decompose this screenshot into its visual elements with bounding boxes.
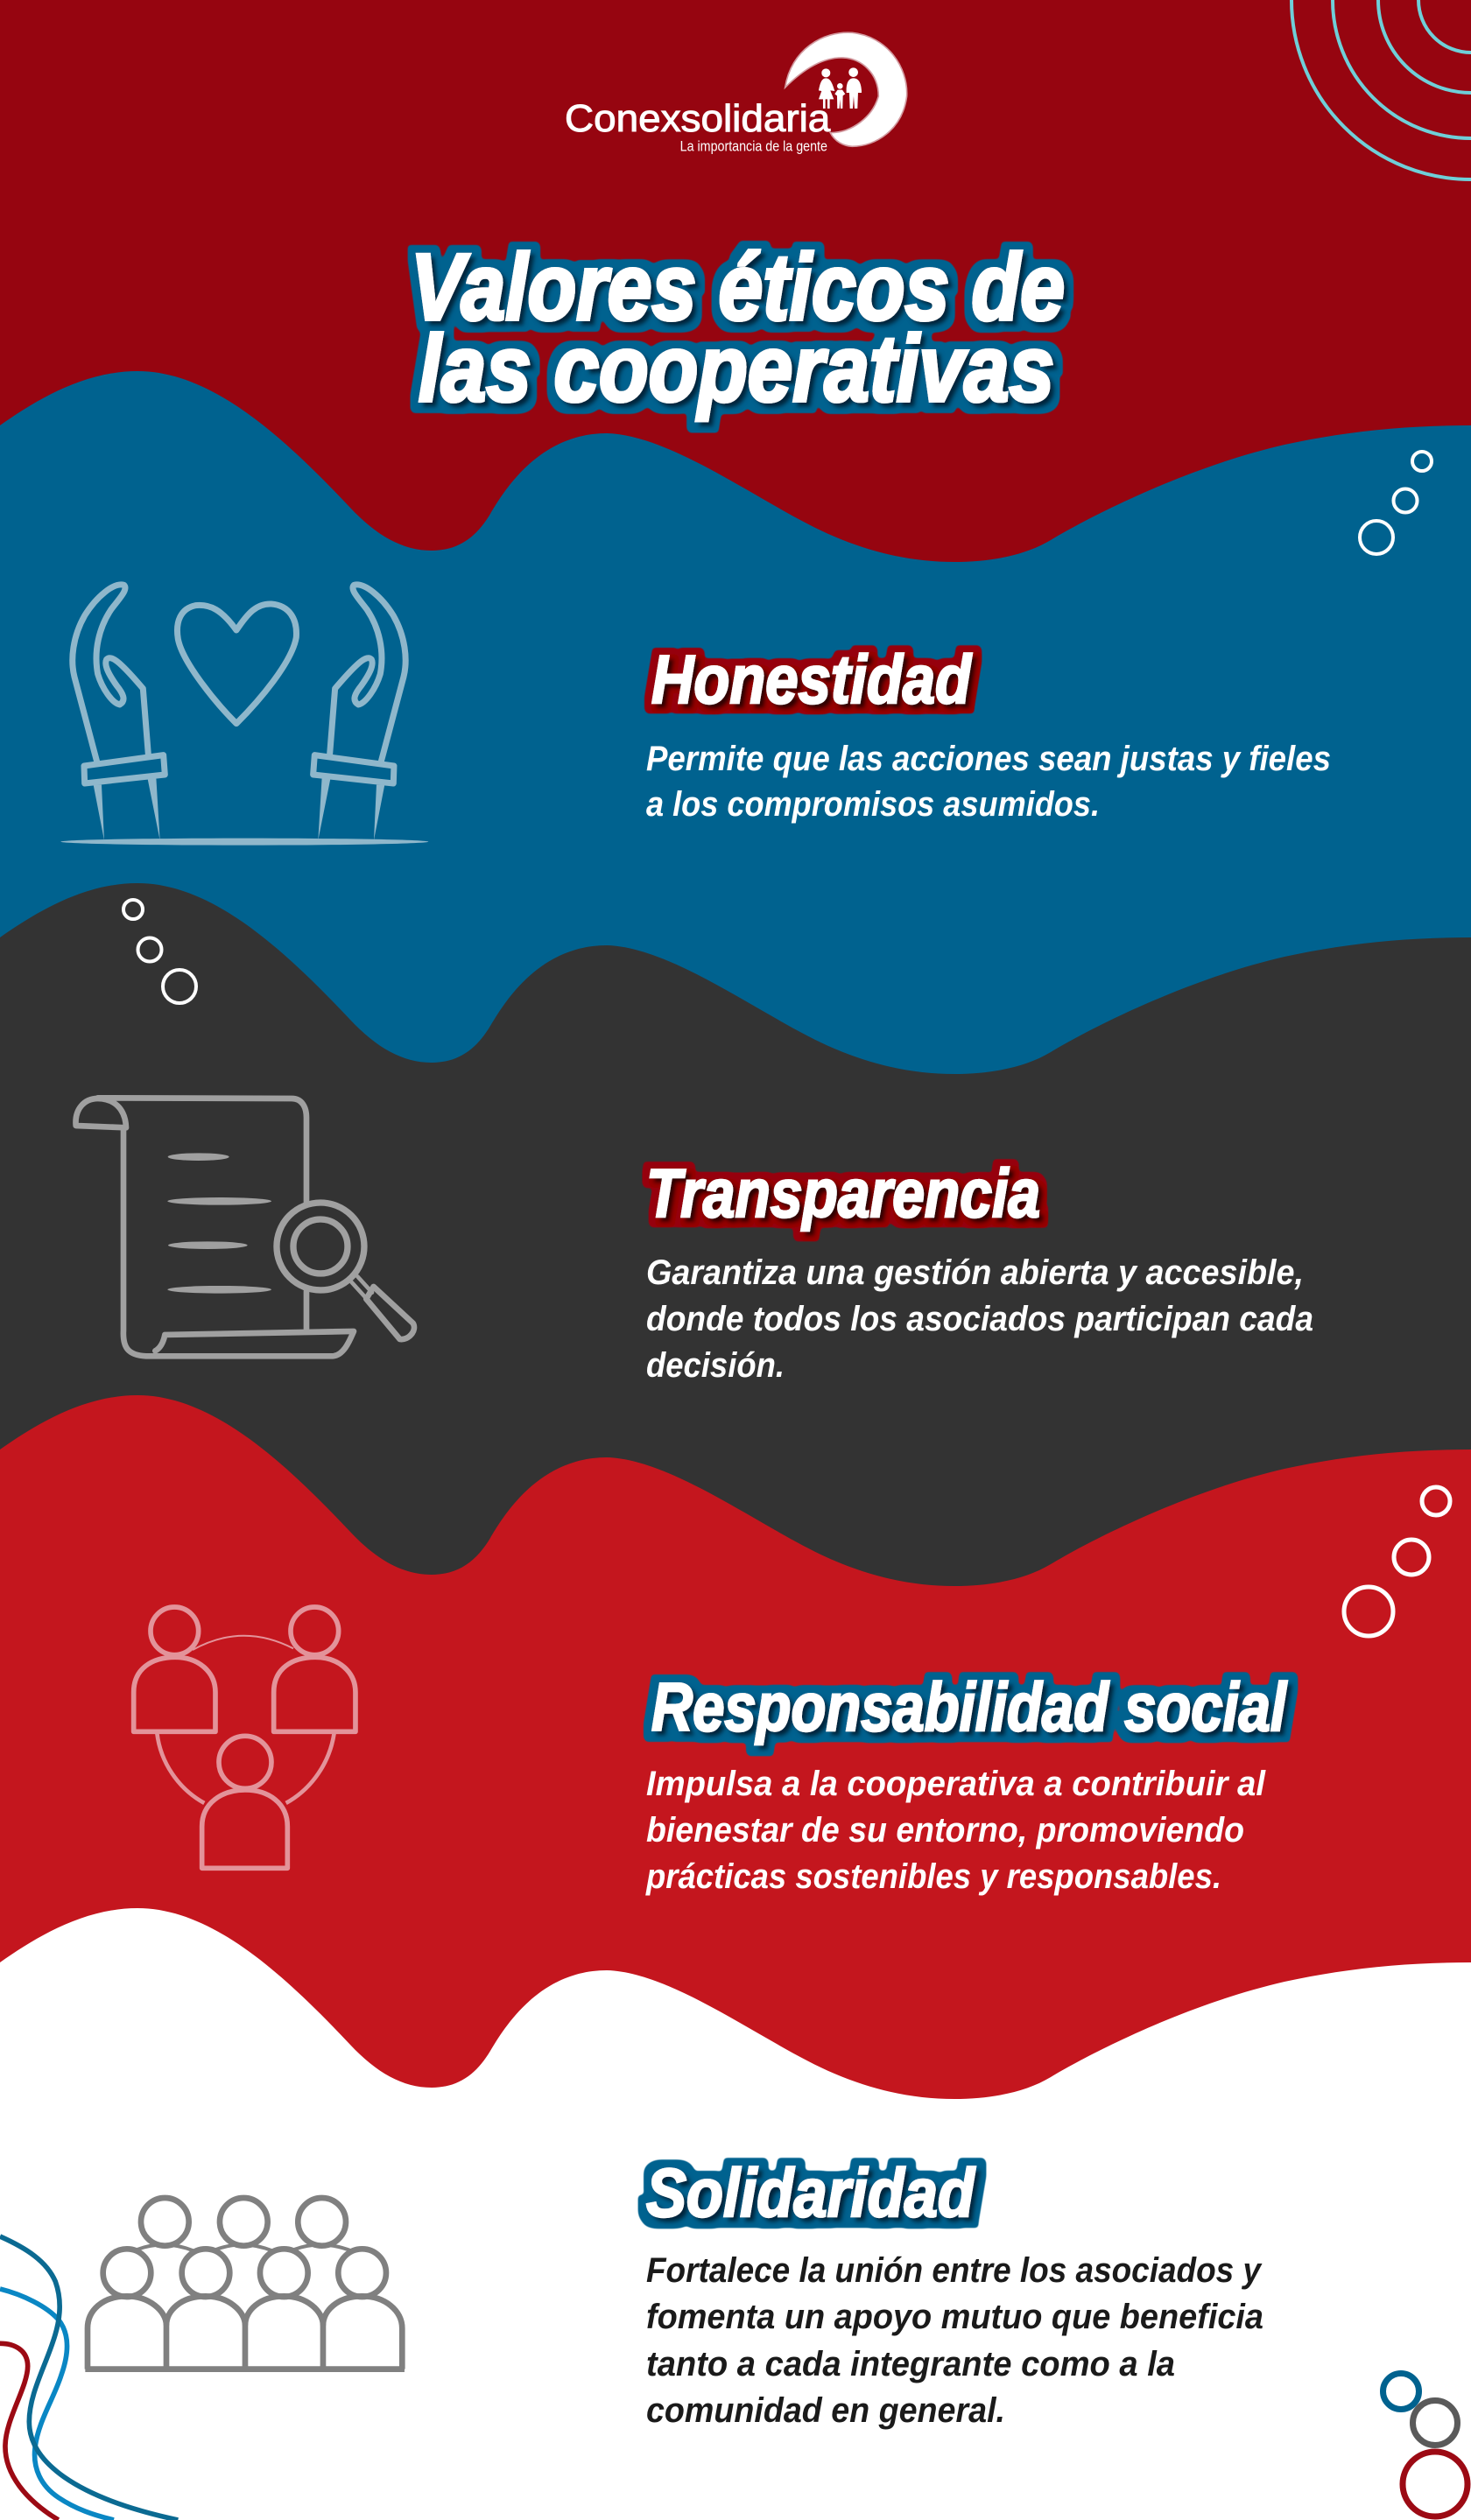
icon: three connected people bbox=[134, 1607, 355, 1868]
heading: Honestidad: Honestidad bbox=[651, 641, 972, 718]
logo: Conexsolidaria: La importancia de la gente bbox=[680, 137, 827, 154]
text: Solidaridad body: fomenta un apoyo mutuo que beneficia bbox=[646, 2298, 1263, 2336]
icon: bubbles bottom right bbox=[1383, 2374, 1467, 2516]
text: Transparencia body bbox=[646, 1253, 1313, 1385]
text: Transparencia body: decisión. bbox=[646, 1346, 785, 1385]
text: Honestidad body: Permite que las acciones sean justas y fieles bbox=[646, 740, 1331, 778]
icon: bubbles dark section bbox=[123, 900, 196, 1003]
text: Honestidad body: a los compromisos asumidos. bbox=[646, 785, 1100, 824]
text: Responsabilidad body bbox=[645, 1765, 1266, 1896]
text: Transparencia body: Garantiza una gestión abierta y accesible, bbox=[646, 1253, 1304, 1292]
text: Honestidad body bbox=[646, 740, 1331, 824]
icon: hands and heart bbox=[60, 585, 428, 846]
heading: Transparencia: Transparencia bbox=[646, 1155, 1040, 1232]
heading: Solidaridad: Solidaridad bbox=[646, 2154, 975, 2231]
icon: group of people bbox=[85, 2198, 405, 2369]
icon: bubbles red section bbox=[1344, 1487, 1450, 1636]
panel: transparencia wave bbox=[0, 883, 1471, 2520]
icon: concentric arcs top right bbox=[1292, 0, 1471, 179]
panel: solidaridad wave bbox=[0, 1908, 1471, 2520]
icon: bubbles blue section bbox=[1360, 452, 1432, 554]
icon: wavy lines bottom left bbox=[0, 2236, 178, 2520]
icon: document and magnifier bbox=[76, 1098, 414, 1356]
title: Valores éticos de bbox=[411, 234, 1065, 340]
text: Responsabilidad body: bienestar de su entorno, promoviendo bbox=[646, 1811, 1244, 1850]
text: Transparencia body: donde todos los asociados participan cada bbox=[646, 1300, 1313, 1338]
text: Responsabilidad body: Impulsa a la cooperativa a contribuir al bbox=[646, 1765, 1266, 1803]
text: Solidaridad body: tanto a cada integrante como a la bbox=[646, 2345, 1175, 2383]
logo: Conexsolidaria: Conexsolidaria bbox=[565, 97, 831, 140]
heading: Responsabilidad social: Responsabilidad social bbox=[651, 1668, 1287, 1745]
text: Solidaridad body: Fortalece la unión entre los asociados y bbox=[646, 2251, 1263, 2290]
panel: responsabilidad wave bbox=[0, 1395, 1471, 2520]
text: Solidaridad body bbox=[646, 2251, 1263, 2430]
text: Responsabilidad body: prácticas sostenibles y responsables. bbox=[645, 1857, 1221, 1896]
title: las cooperativas bbox=[419, 315, 1054, 421]
title bbox=[411, 234, 1065, 421]
text: Solidaridad body: comunidad en general. bbox=[646, 2391, 1005, 2430]
logo: Conexsolidaria bbox=[565, 32, 907, 154]
